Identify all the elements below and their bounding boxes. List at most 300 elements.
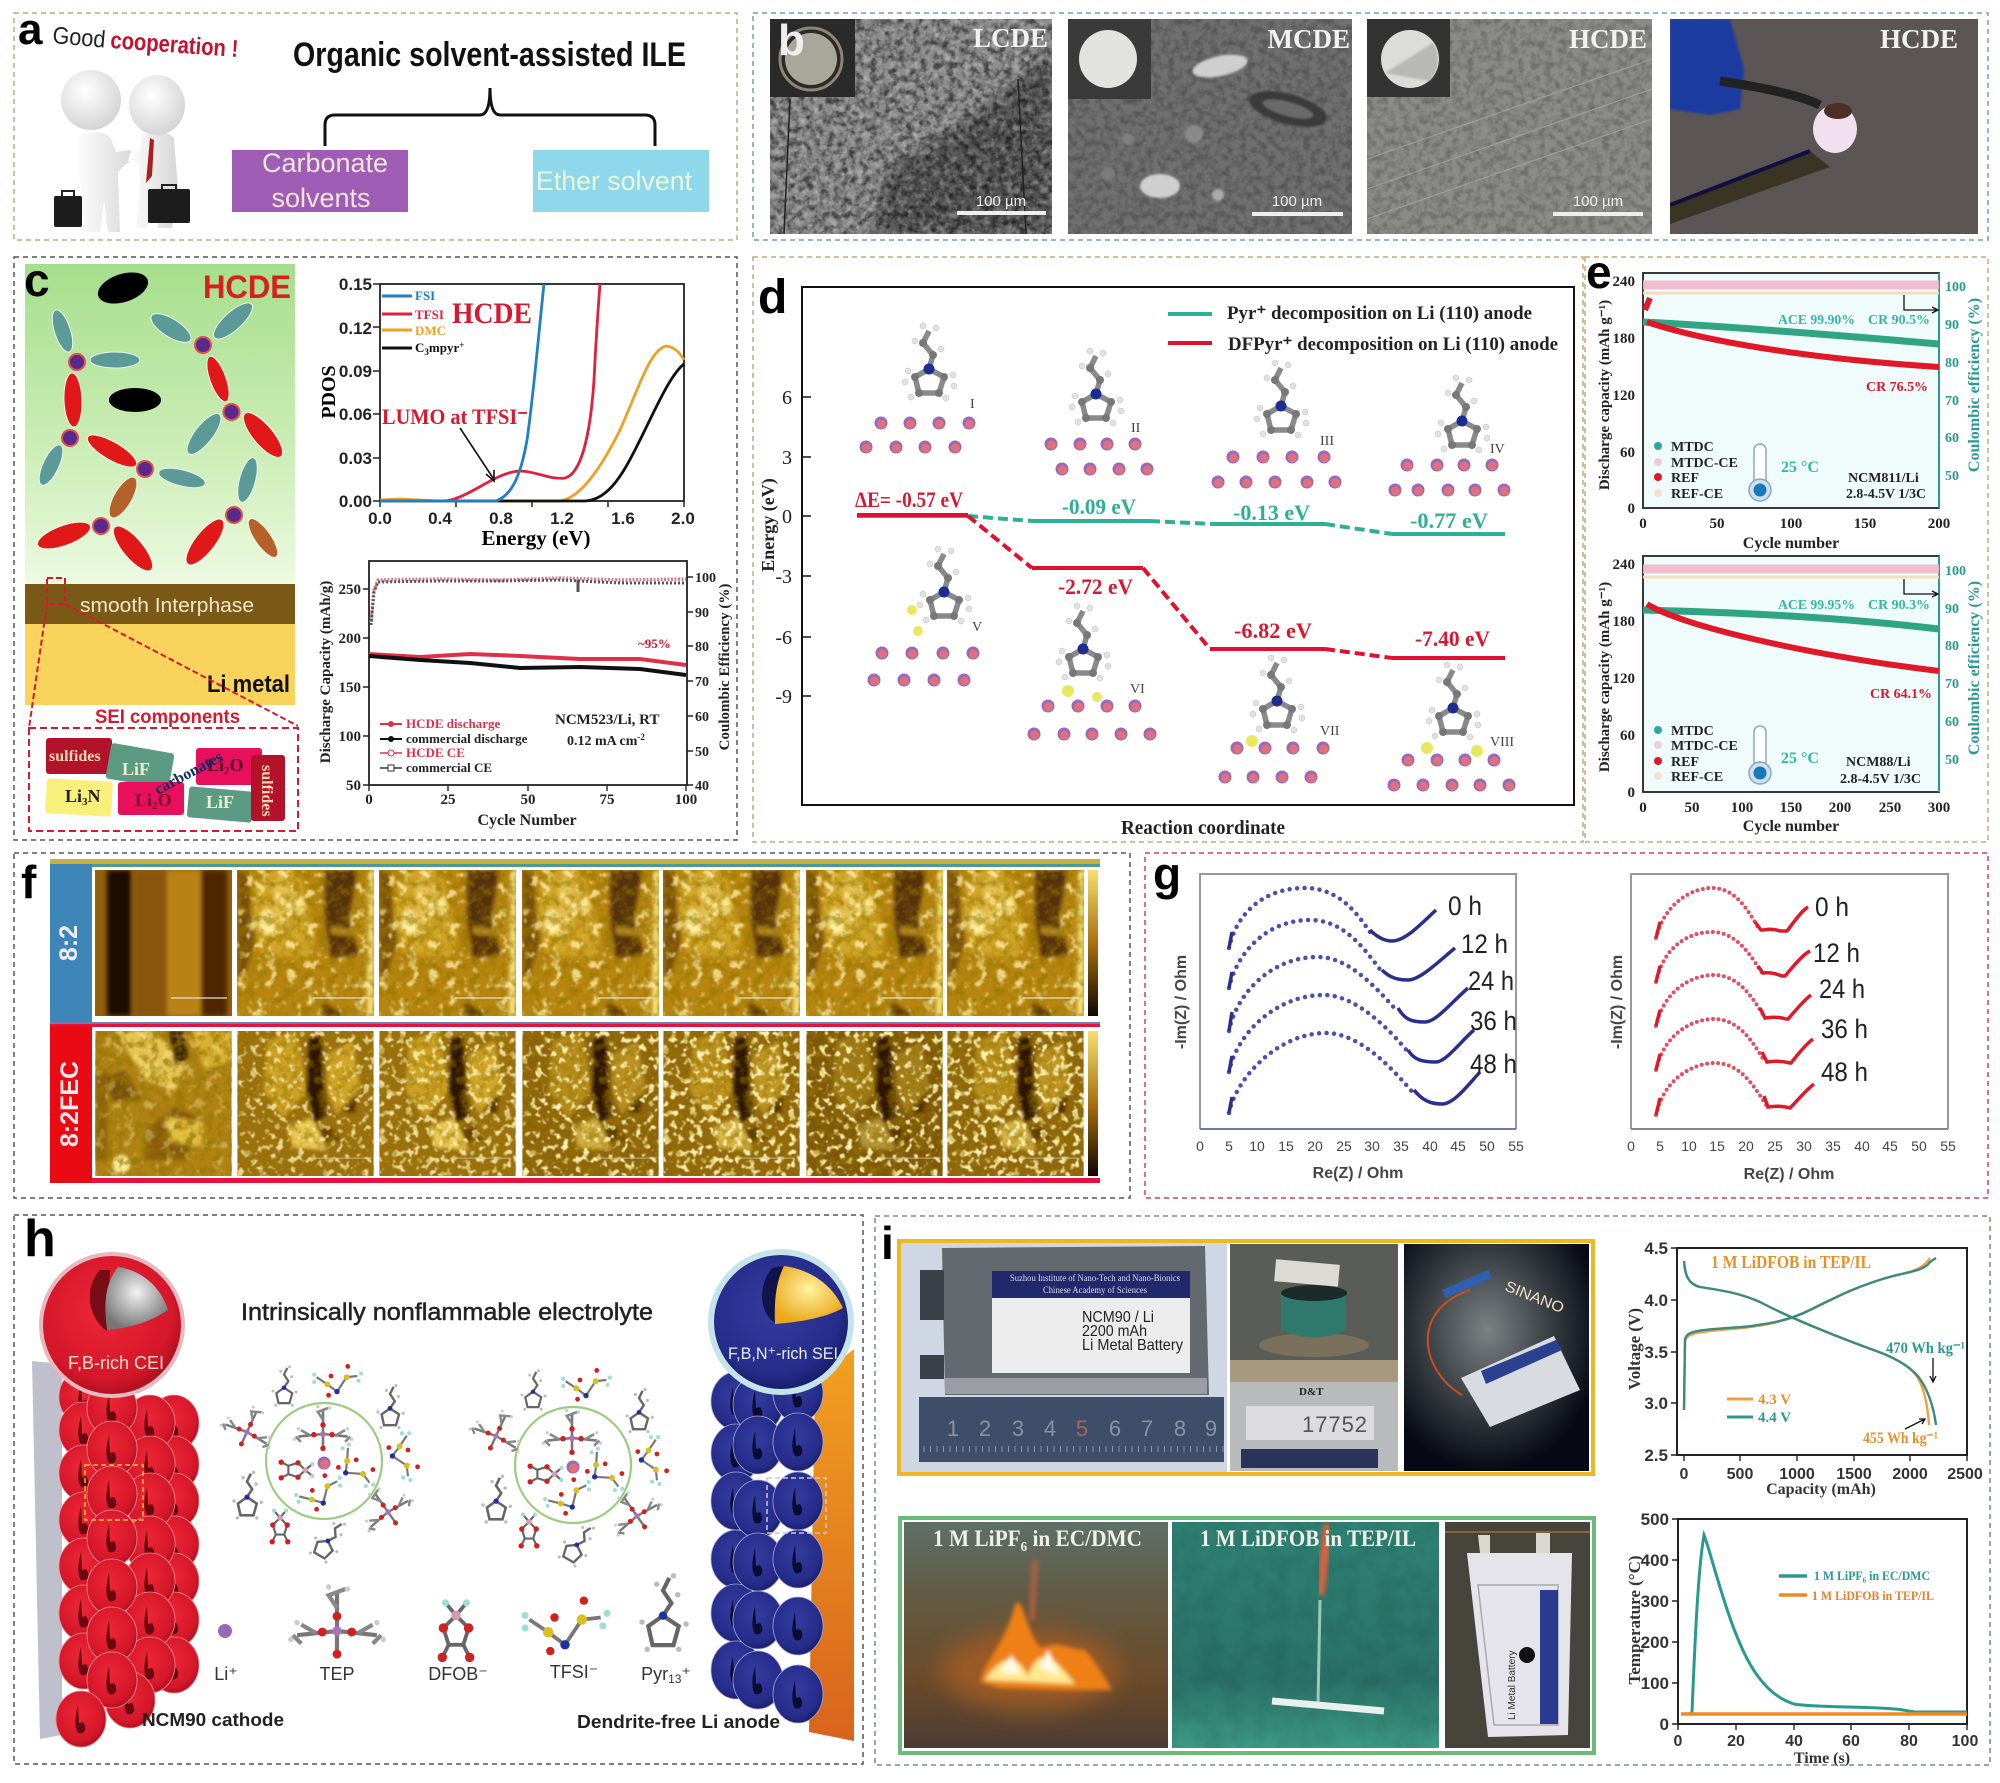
impedance chart left: -Im(Z) / Ohm — [1173, 955, 1190, 1049]
cycling chart: ~95% — [638, 636, 671, 651]
photo: 2200 mAh pouch cell: 1 — [947, 1416, 959, 1441]
chart NCM88: 100 — [1731, 800, 1753, 816]
impedance chart left: 20 — [1307, 1138, 1323, 1154]
cycling chart: 100 — [675, 792, 697, 808]
solvation cluster right — [464, 1368, 669, 1570]
chart NCM88: 200 — [1829, 800, 1851, 816]
molecule legend: Pyr — [641, 1664, 668, 1684]
SEI components: 3 — [82, 796, 88, 808]
impedance chart right: Re(Z) / Ohm — [1744, 1166, 1834, 1183]
ether solvent box — [533, 150, 709, 212]
molecular configurations I to VIII: III — [1320, 434, 1334, 449]
impedance chart left: 55 — [1508, 1138, 1524, 1154]
impedance chart right: 48 h — [1821, 1057, 1868, 1087]
SEI components: O — [230, 755, 244, 775]
cycling chart: -2 — [637, 732, 645, 742]
photo: 2200 mAh pouch cell: 9 — [1205, 1416, 1217, 1441]
impedance chart left: 12 h — [1461, 929, 1508, 959]
panel b: SEM images of lithium deposition — [753, 13, 1988, 240]
molecular configurations I to VIII: VII — [1320, 724, 1340, 739]
PDOS chart: 0.15 — [339, 275, 372, 294]
CEI sphere — [39, 1252, 185, 1398]
chart NCM88: 250 — [1879, 800, 1901, 816]
SEM image HCDE: 100 µm — [1573, 193, 1623, 210]
temperature chart: Time (s) — [1794, 1750, 1850, 1767]
chart NCM88: REF-CE — [1671, 770, 1723, 785]
molecular configurations I to VIII: I — [970, 397, 975, 412]
molecular configurations I to VIII: VIII — [1490, 735, 1514, 750]
impedance chart right: 15 — [1709, 1138, 1725, 1154]
chart NCM88: CR 90.3% — [1868, 598, 1930, 613]
SEM image HCDE — [1367, 19, 1652, 234]
panel letter d: d — [758, 271, 787, 324]
cycling chart: Discharge Capacity (mAh/g) — [318, 581, 334, 763]
panel letter g: g — [1153, 848, 1181, 900]
ether solvent box: Ether solvent — [536, 166, 692, 196]
chart NCM88: 80 — [1945, 639, 1959, 654]
temperature chart: 100 — [1952, 1733, 1978, 1750]
voltage chart: 455 Wh kg⁻¹ — [1863, 1430, 1938, 1447]
impedance chart left: 48 h — [1470, 1049, 1517, 1079]
chart NCM88: 2.8-4.5V 1/3C — [1840, 772, 1921, 787]
energy values: -2.72 eV — [1058, 574, 1133, 599]
chart NCM88: 25 °C — [1781, 750, 1819, 767]
photo: pouch after nail test — [1445, 1522, 1590, 1748]
molecular configurations I to VIII: V — [972, 620, 982, 635]
chart NCM811: 50 — [1710, 516, 1724, 532]
chart NCM88: 240 — [1612, 557, 1635, 573]
PDOS chart: 0.8 — [489, 509, 513, 528]
chart NCM88: 70 — [1945, 677, 1959, 692]
PDOS chart: 0.4 — [428, 509, 452, 528]
chart NCM811: 80 — [1945, 356, 1959, 371]
chart NCM88: 50 — [1684, 800, 1700, 816]
chart NCM811: REF — [1671, 471, 1699, 486]
cycling chart: 60 — [695, 710, 709, 725]
molecule legend: ⁺ — [681, 1664, 691, 1684]
PDOS chart: 2.0 — [671, 509, 695, 528]
temperature chart: 0 — [1660, 1715, 1669, 1734]
slogan: Good — [51, 22, 107, 54]
chart NCM88: 50 — [1945, 753, 1959, 768]
photo: flexible HCDE lithium — [1670, 19, 1978, 234]
chart NCM811: NCM811/Li — [1848, 471, 1919, 486]
cycling legend — [380, 716, 528, 775]
temperature chart: 80 — [1900, 1733, 1918, 1750]
chart NCM811: 90 — [1945, 318, 1959, 333]
temperature chart: 20 — [1727, 1733, 1745, 1750]
voltage chart: Voltage (V) — [1625, 1308, 1644, 1390]
temperature chart: 500 — [1641, 1510, 1669, 1529]
voltage chart: 2500 — [1947, 1466, 1983, 1483]
voltage chart: 3.0 — [1644, 1394, 1668, 1413]
molecule legend: 13 — [668, 1672, 682, 1686]
energy axis: -3 — [775, 566, 792, 588]
temperature curves — [1690, 1535, 1967, 1714]
temperature chart: 60 — [1842, 1733, 1860, 1750]
SEM image MCDE — [1068, 19, 1352, 234]
cycling legend: HCDE CE — [406, 745, 465, 760]
cycling chart: NCM523/Li, RT — [555, 712, 659, 728]
chart NCM88: Cycle number — [1743, 818, 1839, 835]
photo: 2200 mAh pouch cell: Suzhou Institute of Nano-Tech and Nano-Bionics — [1010, 1273, 1180, 1284]
impedance chart left: 45 — [1450, 1138, 1466, 1154]
chart NCM811: 25 °C — [1781, 459, 1819, 476]
cycling chart: 80 — [695, 640, 709, 655]
panel g: impedance spectra — [1145, 848, 1988, 1198]
photo: cell on balance: D&T — [1299, 1386, 1324, 1398]
molecule legend — [214, 1573, 691, 1686]
impedance chart left: 24 h — [1468, 966, 1514, 996]
cycling chart: 250 — [338, 582, 361, 598]
SEM image MCDE: MCDE — [1268, 24, 1350, 54]
voltage chart: Capacity (mAh) — [1766, 1481, 1876, 1498]
photo: 2200 mAh pouch cell: 7 — [1141, 1416, 1153, 1441]
impedance chart right: 55 — [1940, 1138, 1956, 1154]
PDOS chart: LUMO at TFSI⁻ — [382, 404, 528, 429]
PDOS legend — [382, 288, 464, 357]
molecule legend: TFSI⁻ — [550, 1662, 598, 1682]
chart NCM811: REF-CE — [1671, 487, 1723, 502]
heading: Intrinsically nonflammable electrolyte — [241, 1299, 653, 1326]
temperature chart: 1 M LiPF₆ in EC/DMC — [1814, 1568, 1930, 1583]
SEI components: sulfides — [49, 748, 101, 765]
chart NCM811: MTDC — [1671, 440, 1714, 455]
photo: burning LiPF6 electrolyte: 6 — [1021, 1540, 1027, 1555]
SEI components: O — [158, 790, 172, 810]
voltage chart: 4.4 V — [1758, 1410, 1791, 1426]
temperature chart: Temperature (°C) — [1625, 1555, 1644, 1685]
cycling chart: 40 — [695, 779, 709, 794]
PDOS chart: PDOS — [318, 365, 340, 419]
slogan — [51, 22, 239, 63]
row label 8:2FEC: 8:2FEC — [56, 1061, 84, 1147]
cycling chart: 0.12 mA cm — [567, 734, 637, 749]
panel h: nonflammable electrolyte schematic: Dendrite-free Li anode — [577, 1712, 780, 1732]
SEM image LCDE: 100 µm — [976, 193, 1026, 210]
PDOS chart: 0.12 — [339, 319, 372, 338]
cycling chart — [318, 561, 733, 829]
cycling chart: Cycle Number — [477, 812, 577, 829]
brace — [325, 88, 655, 146]
chart NCM811: 70 — [1945, 394, 1959, 409]
photo: 2200 mAh pouch cell: Li Metal Battery — [1082, 1337, 1183, 1354]
PDOS legend: DMC — [415, 323, 446, 338]
SEM image LCDE: b — [778, 16, 805, 65]
temperature chart: 300 — [1641, 1592, 1669, 1611]
reaction coordinate label: Reaction coordinate — [1121, 817, 1285, 839]
voltage chart: 1000 — [1779, 1466, 1815, 1483]
impedance chart right: 24 h — [1819, 974, 1865, 1004]
energy density arrows — [1905, 1358, 1936, 1429]
plot frame — [802, 287, 1574, 805]
panel letter f: f — [21, 856, 37, 908]
energy axis: 0 — [782, 506, 792, 528]
panel letter a: a — [18, 5, 43, 54]
panel c: solvation structure, PDOS and cycling — [14, 254, 737, 840]
anion petals — [34, 298, 261, 504]
chart NCM88: 100 — [1945, 564, 1966, 579]
SEM image LCDE — [770, 16, 1052, 234]
arrow to LUMO — [460, 428, 494, 481]
cycling chart: 150 — [338, 680, 361, 696]
solvent molecules black — [94, 267, 161, 412]
cycling chart: 50 — [520, 792, 536, 808]
cycling chart: Coulombic Efficiency (%) — [717, 584, 733, 750]
temperature chart: 40 — [1785, 1733, 1803, 1750]
impedance chart right: 36 h — [1821, 1014, 1868, 1044]
panel letter h: h — [24, 1210, 56, 1268]
cycling chart: 100 — [338, 729, 361, 745]
cycling chart: 100 — [695, 571, 716, 586]
PDOS legend: mpyr — [429, 340, 459, 355]
molecular configurations I to VIII — [860, 323, 1516, 792]
panel letter e: e — [1586, 246, 1612, 298]
cycling chart: 25 — [440, 792, 456, 808]
photo: cell on balance — [1230, 1244, 1398, 1471]
photo: 2200 mAh pouch cell: 4 — [1044, 1416, 1056, 1441]
photo: 2200 mAh pouch cell: 2200 mAh — [1082, 1323, 1147, 1340]
panel f: AFM images — [14, 853, 1130, 1198]
chart NCM811: CR 90.5% — [1868, 313, 1930, 328]
energy axis: -6 — [775, 627, 792, 649]
voltage chart: 4.0 — [1644, 1291, 1668, 1310]
impedance chart right: 40 — [1854, 1138, 1870, 1154]
photo: 2200 mAh pouch cell: 6 — [1109, 1416, 1121, 1441]
icon: two figures shaking hands — [54, 70, 190, 232]
cycling chart: 0 — [365, 792, 373, 808]
SEI components — [29, 707, 298, 831]
yellow framed photos — [899, 1241, 1593, 1474]
photo: LED lit by pouch cell — [1404, 1244, 1589, 1471]
panel a: cooperation of solvents — [14, 5, 737, 240]
energy axis: 6 — [782, 387, 792, 409]
SEI components: sulfides — [258, 765, 275, 817]
photo: 2200 mAh pouch cell: Chinese Academy of Sciences — [1043, 1285, 1147, 1296]
chart NCM811: 0 — [1628, 501, 1635, 517]
panel i: pouch cell performance and safety — [875, 1216, 1990, 1767]
SEM image LCDE: LCDE — [973, 23, 1048, 53]
chart NCM811 — [1597, 273, 1983, 552]
SEM image MCDE: 100 µm — [1272, 193, 1322, 210]
impedance chart left: 0 — [1196, 1138, 1204, 1154]
chart NCM88: Coulombic efficiency (%) — [1966, 581, 1983, 755]
chart NCM811: ACE 99.90% — [1778, 313, 1855, 328]
impedance chart right: 10 — [1681, 1138, 1697, 1154]
chart NCM88: 0 — [1639, 800, 1647, 816]
SEI components: Li — [135, 790, 152, 810]
solvation cluster left — [215, 1364, 420, 1566]
chart NCM811: 200 — [1928, 516, 1950, 532]
photo: LED lit by pouch cell: SINANO — [1503, 1278, 1566, 1317]
SEI components: LiF — [206, 792, 234, 812]
chart NCM88: REF — [1671, 755, 1699, 770]
temperature chart: 200 — [1641, 1633, 1669, 1652]
PDOS chart: 0.00 — [339, 492, 372, 511]
PDOS chart: 1.2 — [550, 509, 574, 528]
electrode captions: NCM90 cathode — [142, 1710, 284, 1730]
green framed photos — [900, 1518, 1594, 1753]
impedance chart right: -Im(Z) / Ohm — [1609, 955, 1626, 1049]
voltage chart: 470 Wh kg⁻¹ — [1886, 1340, 1965, 1357]
row label 8:2FEC — [50, 1026, 92, 1183]
impedance chart right: 0 h — [1815, 892, 1849, 922]
AFM row 8:2 — [95, 870, 1098, 1016]
legend — [1168, 303, 1558, 355]
energy values: -0.13 eV — [1233, 500, 1310, 525]
cycling curves — [369, 578, 686, 675]
carbonate solvents box: Carbonate — [262, 148, 388, 178]
SEI sphere — [708, 1249, 854, 1395]
impedance chart right: 25 — [1767, 1138, 1783, 1154]
impedance chart right: 30 — [1796, 1138, 1812, 1154]
SEI components: carbonates — [152, 748, 226, 799]
chart NCM811: Cycle number — [1743, 535, 1839, 552]
photo: 2200 mAh pouch cell: 2 — [979, 1416, 991, 1441]
CEI sphere: F,B-rich CEI — [68, 1353, 164, 1373]
voltage chart: 0 — [1680, 1466, 1689, 1483]
impedance chart right: 12 h — [1813, 938, 1860, 968]
chart NCM88: 60 — [1620, 728, 1635, 744]
heading: Organic solvent-assisted ILE — [293, 36, 686, 74]
PDOS chart: 0.09 — [339, 362, 372, 381]
PDOS chart: 0.03 — [339, 449, 372, 468]
PDOS legend: + — [459, 340, 464, 350]
cycling chart: 70 — [695, 675, 709, 690]
impedance chart left: 35 — [1393, 1138, 1409, 1154]
impedance chart left: 0 h — [1448, 891, 1482, 921]
voltage chart: 1 M LiDFOB in TEP/IL — [1711, 1252, 1871, 1272]
impedance chart right: 0 — [1627, 1138, 1635, 1154]
energy values: -0.77 eV — [1410, 508, 1488, 533]
chart NCM811: Discharge capacity (mAh g⁻¹) — [1597, 300, 1613, 490]
impedance chart right: 35 — [1825, 1138, 1841, 1154]
PDOS chart — [318, 275, 695, 550]
temperature chart: 400 — [1641, 1551, 1669, 1570]
energy axis: 3 — [782, 447, 792, 469]
voltage chart: 4.3 V — [1758, 1392, 1791, 1408]
SEI components: N — [88, 786, 101, 806]
energy values: -6.82 eV — [1234, 618, 1312, 643]
panel h: nonflammable electrolyte schematic — [14, 1210, 863, 1764]
impedance chart left: 40 — [1422, 1138, 1438, 1154]
chart NCM88: CR 64.1% — [1870, 687, 1932, 702]
voltage chart: 3.5 — [1644, 1343, 1668, 1362]
chart NCM811: 120 — [1612, 388, 1635, 404]
SEM image HCDE: HCDE — [1569, 24, 1647, 54]
photo: non-burning LiDFOB electrolyte — [1172, 1522, 1439, 1748]
impedance chart left — [1173, 874, 1524, 1182]
schematic of HCDE: smooth Interphase — [80, 595, 254, 617]
chart NCM88: ACE 99.95% — [1778, 598, 1855, 613]
legend: Pyr⁺ decomposition on Li (110) anode — [1227, 303, 1532, 324]
temperature chart: 0 — [1674, 1733, 1683, 1750]
photo: flexible HCDE lithium: HCDE — [1880, 24, 1958, 54]
voltage chart — [1625, 1239, 1983, 1498]
photo: burning LiPF6 electrolyte — [904, 1522, 1168, 1748]
AFM row 8:2FEC — [95, 1031, 1098, 1176]
impedance chart left: 10 — [1249, 1138, 1265, 1154]
chart NCM811: Coulombic efficiency (%) — [1966, 298, 1983, 472]
voltage chart: 4.5 — [1644, 1239, 1668, 1258]
carbonate solvents box — [232, 148, 408, 213]
chart NCM811: 240 — [1612, 274, 1635, 290]
chart NCM88: MTDC-CE — [1671, 739, 1738, 754]
photo: 2200 mAh pouch cell: NCM90 / Li — [1082, 1309, 1154, 1326]
impedance chart left: 50 — [1479, 1138, 1495, 1154]
impedance chart left: 25 — [1336, 1138, 1352, 1154]
cycling legend: HCDE discharge — [406, 716, 500, 731]
Li anode spheres — [711, 1349, 854, 1741]
chart NCM88: 180 — [1612, 614, 1635, 630]
PDOS chart: 0.06 — [339, 405, 372, 424]
voltage chart: 1500 — [1836, 1466, 1872, 1483]
energy values: -7.40 eV — [1415, 626, 1490, 651]
temperature chart: 100 — [1641, 1674, 1669, 1693]
schematic of HCDE: c — [24, 254, 50, 306]
photo: cell on balance: 17752 — [1302, 1412, 1367, 1437]
chart NCM811: 100 — [1945, 280, 1966, 295]
DFPyr energy levels — [857, 515, 1505, 658]
PDOS chart: Energy (eV) — [481, 526, 591, 550]
cycling legend: commercial discharge — [406, 731, 528, 746]
molecular configurations I to VIII: VI — [1130, 682, 1145, 697]
energy axis: Energy (eV) — [758, 478, 779, 572]
schematic of HCDE: HCDE — [203, 269, 291, 305]
energy values — [855, 487, 1490, 651]
energy axis: -9 — [775, 686, 792, 708]
panel e: cycling performance — [1585, 246, 1988, 842]
energy values: -0.09 eV — [1062, 494, 1136, 519]
photo: pouch after nail test: Li Metal Battery — [1507, 1651, 1518, 1720]
chart NCM88: Discharge capacity (mAh g⁻¹) — [1597, 582, 1613, 772]
photo: non-burning LiDFOB electrolyte: 1 M LiDFOB in TEP/IL — [1200, 1526, 1416, 1551]
cycling chart: 50 — [346, 778, 361, 794]
chart NCM811: CR 76.5% — [1866, 380, 1928, 395]
impedance chart right: 50 — [1911, 1138, 1927, 1154]
header bands — [50, 859, 1100, 1183]
PDOS chart: 1.6 — [611, 509, 635, 528]
molecular configurations I to VIII: II — [1131, 421, 1141, 436]
photo: 2200 mAh pouch cell: 8 — [1174, 1416, 1186, 1441]
row label 8:2 — [50, 864, 92, 1022]
row label 8:2: 8:2 — [55, 925, 83, 961]
chart NCM88: 60 — [1945, 715, 1959, 730]
chart NCM811: 0 — [1639, 516, 1647, 532]
PDOS chart: 0.0 — [368, 509, 392, 528]
PDOS legend: 3 — [424, 347, 429, 357]
SEI components: LiF — [122, 759, 150, 779]
chart NCM88: 0 — [1628, 785, 1635, 801]
impedance chart left: 36 h — [1470, 1006, 1517, 1036]
impedance chart right: 5 — [1656, 1138, 1664, 1154]
cycling legend: commercial CE — [406, 760, 492, 775]
chart NCM88: 120 — [1612, 671, 1635, 687]
lithium ions — [62, 337, 242, 534]
molecule legend: Li⁺ — [214, 1664, 238, 1684]
impedance chart right: 45 — [1882, 1138, 1898, 1154]
chart NCM811: 100 — [1780, 516, 1802, 532]
schematic of HCDE — [24, 254, 298, 728]
PDOS curves — [380, 284, 684, 501]
chart NCM88: 90 — [1945, 602, 1959, 617]
voltage chart: 500 — [1727, 1466, 1753, 1483]
photo: burning LiPF6 electrolyte: in EC/DMC — [1027, 1526, 1142, 1551]
photo: 2200 mAh pouch cell: 5 — [1076, 1416, 1088, 1441]
chart NCM811: 180 — [1612, 331, 1635, 347]
cycling chart: 50 — [695, 745, 709, 760]
chart NCM88: 150 — [1780, 800, 1802, 816]
